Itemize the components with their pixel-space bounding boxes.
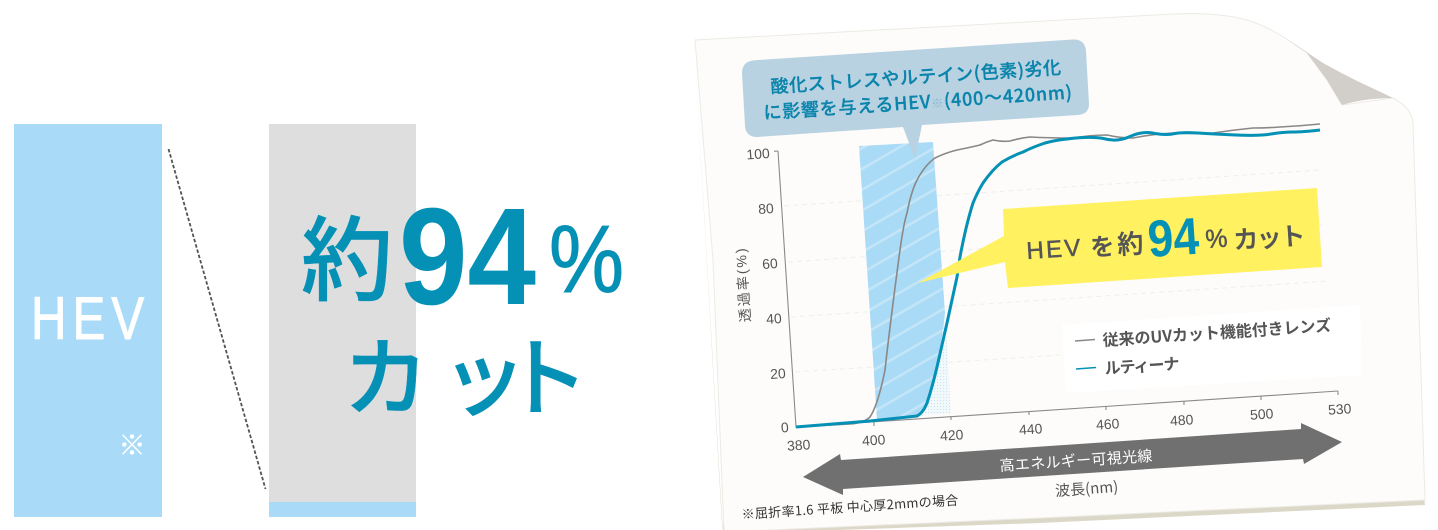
y axis tick labels: 60 xyxy=(762,255,778,272)
headline: about 94% cut: ト xyxy=(503,308,589,434)
callout: HEV about 94% cut: 約 xyxy=(1116,223,1144,262)
callout: HEV about 94% cut: カット xyxy=(1232,216,1306,257)
headline: about 94% cut: カ xyxy=(343,308,429,434)
x axis tick labels xyxy=(786,400,1352,454)
x axis tick labels: 440 xyxy=(1018,420,1043,438)
chart grid lines xyxy=(784,170,1328,372)
panel: full HEV bar xyxy=(14,124,162,517)
y axis tick labels: 100 xyxy=(746,145,770,163)
callout: HEV about 94% cut xyxy=(918,188,1322,288)
headline: about 94% cut: % xyxy=(549,206,624,313)
headline: about 94% cut xyxy=(301,180,624,434)
x axis tick labels: 400 xyxy=(861,431,886,449)
label: HEV: HEV xyxy=(31,284,145,352)
arrow: high energy visible light: 高エネルギー可視光線 xyxy=(999,445,1153,476)
arrow: high energy visible light xyxy=(803,423,1342,495)
panel: remaining HEV bar xyxy=(269,124,416,517)
dashed connector line xyxy=(168,149,266,489)
y axis tick labels: 20 xyxy=(770,365,786,382)
footnote: ※屈折率1.6 平板 中心厚2mmの場合 xyxy=(741,490,959,523)
paper fold xyxy=(1284,37,1393,105)
x axis tick labels: 420 xyxy=(939,426,964,444)
icon: reference mark: ※ xyxy=(118,424,146,463)
headline: about 94% cut: ッ xyxy=(441,308,527,434)
x axis tick labels: 480 xyxy=(1169,411,1194,429)
chart axes xyxy=(774,151,1338,427)
callout: HEV about 94% cut: HEV xyxy=(1026,234,1081,265)
x axis title: 波長(nm) xyxy=(1054,476,1119,501)
legend: Lutina: ルティーナ xyxy=(1104,350,1180,379)
callout: oxidative stress and lutein xyxy=(742,39,1089,159)
y axis tick labels xyxy=(746,145,789,436)
y axis tick labels: 80 xyxy=(758,200,774,217)
x axis tick labels: 500 xyxy=(1249,405,1274,423)
legend: conventional lens: 従来のUVカット機能付きレンズ xyxy=(1102,312,1332,351)
callout: HEV about 94% cut: 94 xyxy=(1146,208,1201,269)
curve: conventional UV cut lens xyxy=(796,124,1320,427)
y axis tick labels: 40 xyxy=(766,310,782,327)
headline: about 94% cut: 約 xyxy=(301,187,393,320)
x axis tick labels: 380 xyxy=(786,436,811,454)
legend backing xyxy=(1062,305,1362,393)
legend xyxy=(1075,312,1332,379)
panel: curled paper chart xyxy=(694,14,1425,530)
callout: HEV about 94% cut: を xyxy=(1089,226,1115,263)
callout: oxidative stress and lutein: に影響を与えるHEV※(400〜420nm) xyxy=(763,79,1073,125)
headline: about 94% cut: 94 xyxy=(399,180,536,334)
y axis tick labels: 0 xyxy=(780,419,789,436)
callout: HEV about 94% cut: % xyxy=(1204,223,1228,254)
HEV band 400-420nm xyxy=(859,142,951,420)
curve: Lutina lens xyxy=(796,130,1320,427)
x axis tick labels: 530 xyxy=(1327,400,1352,418)
y axis title: 透過率(%) xyxy=(733,248,753,323)
x axis tick labels: 460 xyxy=(1095,415,1120,433)
callout: oxidative stress and lutein: 酸化ストレスやルテイン(色素)劣化 xyxy=(770,54,1062,99)
